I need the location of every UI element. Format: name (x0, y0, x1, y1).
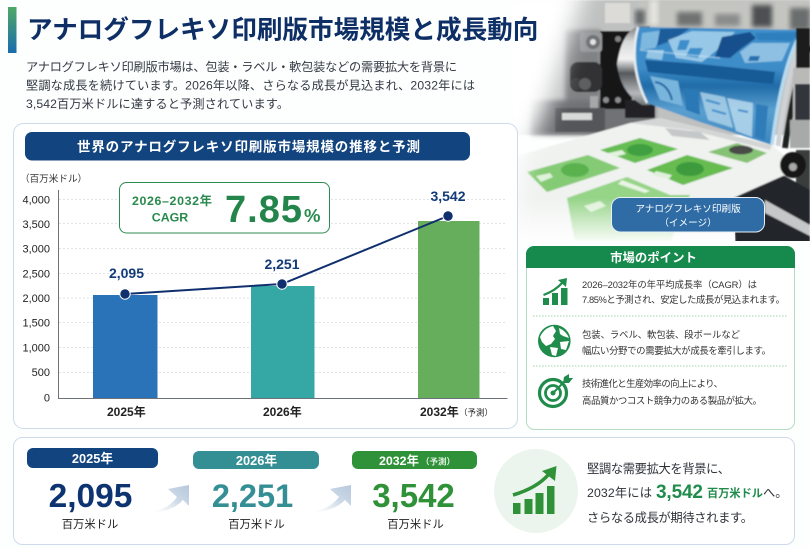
photo caption: アナログフレキソ印刷版 (635, 203, 741, 215)
intro text: アナログフレキソ印刷版市場は、包装・ラベル・軟包装などの需要拡大を背景に (26, 59, 457, 74)
intro text (26, 59, 475, 111)
photo background machinery (510, 0, 810, 135)
title accent bar (8, 7, 16, 53)
icon: globe (538, 325, 571, 357)
summary 2032: 百万米ドル (387, 518, 444, 531)
icon: growth circle (494, 449, 578, 533)
y axis labels: 1,000 (22, 342, 50, 354)
divider (533, 365, 788, 367)
title: アナログフレキソ印刷版市場規模と成長動向 (27, 14, 538, 44)
summary 2026: 百万米ドル (228, 518, 285, 531)
arrow (313, 485, 351, 512)
intro text: 3,542百万米ドルに達すると予測されています。 (26, 97, 289, 111)
y axis labels: 2,500 (22, 268, 50, 280)
photo: printing cylinder (617, 26, 803, 145)
divider (533, 315, 788, 317)
y axis labels: 1,500 (22, 318, 50, 330)
panel: market size chart (14, 124, 518, 428)
point 1 text: 2026–2032年の年平均成長率（CAGR）は (582, 279, 757, 290)
summary 2032: 2032年 (379, 453, 419, 468)
y axis labels: 0 (44, 392, 50, 404)
intro text: 堅調な成長を続けています。2026年以降、さらなる成長が見込まれ、2032年には (26, 78, 475, 92)
callout: CAGR: 7.85 (225, 189, 302, 231)
point 3 text: 技術進化と生産効率の向上により、 (582, 378, 723, 389)
value labels (109, 188, 466, 281)
summary 2025: 百万米ドル (62, 518, 118, 531)
summary 2032 (352, 451, 477, 531)
panel: yearly summary (14, 438, 794, 544)
photo: flexographic printing press (520, 0, 810, 241)
summary statement: 堅調な需要拡大を背景に、 (587, 462, 730, 476)
chart heading: 世界のアナログフレキソ印刷版市場規模の推移と予測 (77, 138, 420, 154)
axes (58, 190, 508, 398)
icon: growth chart (543, 278, 568, 305)
point 3 text: 高品質かつコスト競争力のある製品が拡大。 (582, 395, 762, 406)
bar: 2025 (93, 295, 158, 398)
point 2 text: 幅広い分野での需要拡大が成長を牽引します。 (582, 345, 771, 356)
x axis labels: （予測） (459, 408, 493, 418)
gridlines (59, 200, 507, 372)
y axis labels: 3,500 (22, 219, 50, 231)
panel: market points (526, 246, 795, 430)
summary statement: 3,542 (656, 482, 703, 503)
x axis labels (107, 404, 493, 419)
summary statement: さらなる成長が期待されます。 (587, 510, 753, 525)
point 1 text (582, 279, 785, 305)
bar: 2026 (251, 286, 314, 398)
arrow (152, 485, 189, 512)
y axis labels: 2,000 (22, 293, 50, 305)
point 1 text: 7.85%と予測され、安定した成長が見込まれます。 (582, 294, 785, 305)
photo: right machine frame (778, 28, 810, 200)
y axis labels (22, 194, 50, 404)
x axis labels: 2025年 (107, 404, 146, 419)
x axis labels: 2032年 (420, 404, 459, 419)
callout: CAGR: 2026–2032年 (132, 193, 212, 208)
point 3 text (582, 378, 762, 406)
bar: 2032 forecast (418, 221, 480, 398)
photo caption (612, 198, 764, 232)
y axis labels: 3,000 (22, 244, 50, 256)
callout: CAGR (120, 182, 330, 233)
points heading: 市場のポイント (610, 250, 697, 265)
summary statement (587, 462, 788, 525)
value labels: 2,251 (264, 256, 300, 272)
summary 2025 (27, 448, 158, 531)
summary statement: 百万米ドル (707, 486, 763, 500)
callout: CAGR: CAGR (152, 210, 188, 224)
summary 2032: 3,542 (372, 477, 455, 514)
y axis labels: 500 (32, 367, 50, 379)
icon: target (540, 374, 573, 406)
photo caption: （イメージ） (659, 217, 717, 229)
x axis labels: 2026年 (263, 404, 302, 419)
value labels: 2,095 (109, 265, 144, 281)
point 2 text: 包装、ラベル、軟包装、段ボールなど (582, 329, 741, 340)
y axis labels: 4,000 (22, 194, 50, 206)
summary 2025: 2025年 (72, 451, 113, 466)
trend line (120, 211, 453, 299)
points heading (526, 246, 795, 268)
summary 2026: 2,251 (212, 478, 293, 514)
chart heading (25, 132, 470, 160)
summary statement: へ。 (763, 486, 788, 500)
summary 2026 (193, 451, 319, 531)
summary statement: 2032年には (587, 486, 652, 500)
summary 2032: （予測） (421, 456, 455, 466)
value labels: 3,542 (430, 188, 466, 204)
point 2 text (582, 329, 771, 356)
summary 2026: 2026年 (236, 453, 277, 468)
callout: CAGR: % (304, 205, 320, 226)
axis unit label: （百万米ドル） (20, 173, 87, 185)
summary 2025: 2,095 (49, 478, 132, 515)
photo: printed sheet (510, 118, 810, 243)
